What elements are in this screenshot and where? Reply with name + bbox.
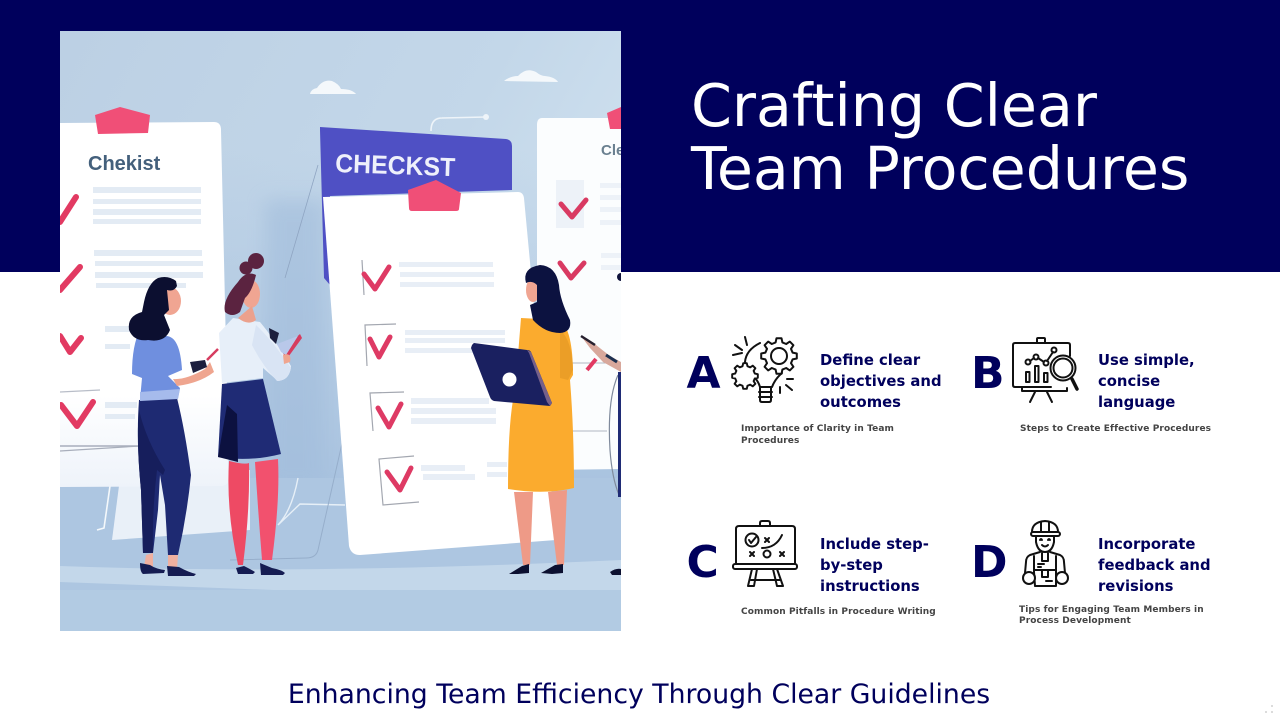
icon: tactics board on easel	[732, 520, 798, 587]
item C	[686, 520, 936, 616]
small sky accent	[617, 273, 625, 281]
sky background	[60, 31, 621, 631]
heading A: objectives and	[820, 373, 942, 390]
heading D: revisions	[1098, 578, 1173, 595]
caption C: Common Pitfalls in Procedure Writing	[741, 606, 936, 616]
floor	[60, 478, 621, 631]
letter C: C	[686, 537, 719, 588]
heading C: Include step-	[820, 536, 929, 553]
heading B: Use simple,	[1098, 352, 1195, 369]
corner mark	[1265, 705, 1273, 713]
heading C: instructions	[820, 578, 920, 595]
heading D: Incorporate	[1098, 536, 1195, 553]
clip	[408, 180, 461, 211]
heading D	[1098, 536, 1211, 595]
back stand of the left board	[112, 470, 250, 540]
heading C: by-step	[820, 557, 883, 574]
centre board purple header	[320, 127, 512, 285]
letter A: A	[686, 348, 721, 399]
item B	[971, 337, 1211, 434]
woman in yellow dress with laptop	[471, 265, 574, 574]
left clipboard	[60, 107, 229, 487]
person at right edge	[581, 336, 621, 575]
title	[690, 72, 1189, 203]
item A	[686, 336, 942, 446]
tagline: Enhancing Team Efficiency Through Clear Guidelines	[288, 679, 990, 710]
clip	[95, 107, 150, 134]
heading C	[820, 536, 929, 595]
title: Team Procedures	[691, 135, 1189, 203]
letter B: B	[971, 348, 1005, 399]
caption A	[741, 424, 894, 446]
woman in white top	[218, 253, 302, 575]
brace lines	[285, 165, 318, 278]
centre board purple header: CHECKST	[335, 148, 456, 182]
heading B: concise	[1098, 373, 1160, 390]
heading D: feedback and	[1098, 557, 1211, 574]
heading B: language	[1098, 394, 1175, 411]
caption B: Steps to Create Effective Procedures	[1020, 424, 1211, 434]
caption D: Tips for Engaging Team Members in	[1019, 604, 1204, 614]
centre clipboard	[323, 180, 556, 555]
heading A: outcomes	[820, 394, 901, 411]
icon: lightbulb with gears	[731, 336, 798, 403]
antenna wire	[431, 117, 486, 131]
title: Crafting Clear	[691, 72, 1097, 140]
illustration: team reviewing checklists	[60, 31, 621, 631]
heading A: Define clear	[820, 352, 920, 369]
board title: Chekist	[88, 153, 161, 175]
caption D: Process Development	[1019, 616, 1131, 626]
letter D: D	[971, 537, 1008, 588]
heading B	[1098, 352, 1195, 411]
heading A	[820, 352, 942, 411]
clouds	[310, 70, 558, 94]
icon: worker with helmet	[1022, 520, 1069, 587]
item D	[971, 520, 1211, 626]
right clipboard	[537, 107, 624, 470]
header band	[0, 0, 1280, 272]
icon: presentation board with magnifier	[1012, 337, 1079, 403]
caption A: Procedures	[741, 436, 799, 446]
woman in blue top	[129, 277, 218, 576]
caption A: Importance of Clarity in Team	[741, 424, 894, 434]
caption D	[1019, 604, 1204, 626]
